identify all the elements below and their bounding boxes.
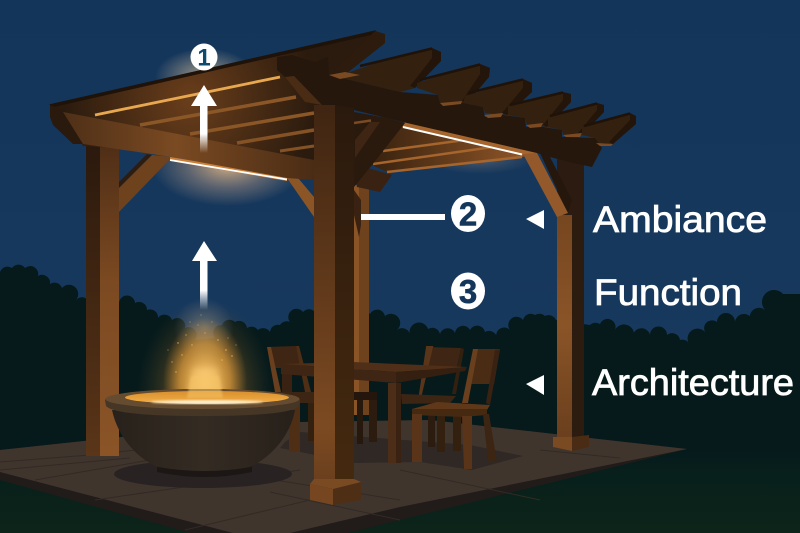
left brace [119, 154, 172, 212]
beam light strip [170, 157, 287, 181]
roof underside and slats [50, 31, 385, 160]
front left beam [50, 105, 314, 180]
glow beneath right beam light [425, 142, 535, 174]
glow beneath beam light [152, 126, 304, 206]
glow above roof [155, 48, 255, 104]
badge 3: 3 [459, 273, 477, 310]
flame over bowl [187, 376, 223, 398]
hedge silhouette [0, 265, 800, 480]
left post [86, 145, 119, 456]
pointer: architecture [526, 375, 544, 395]
patio [0, 420, 687, 533]
plume haze top [174, 298, 234, 358]
fire plume glow [137, 300, 273, 484]
label: Architecture: Architecture [592, 362, 794, 403]
sparks [168, 314, 236, 373]
leader line to badge 2 [361, 214, 445, 220]
fire plume core [163, 318, 247, 446]
table [281, 362, 467, 463]
arrow: upper white arrow [191, 85, 217, 153]
front chair [412, 349, 500, 469]
right-side brace and lower beam [354, 112, 405, 192]
badge 3 [451, 272, 485, 310]
right brace [523, 153, 572, 217]
furniture shadow [280, 432, 523, 470]
label: Function: Function [594, 272, 742, 313]
right roof underside [372, 122, 537, 172]
right rafter tails [329, 48, 636, 144]
fire column [187, 368, 223, 398]
pointer: ambiance [526, 210, 544, 229]
fire bowl [105, 389, 300, 477]
left chair [267, 346, 377, 444]
arrow: lower white arrow [192, 241, 217, 310]
badge 2 [451, 195, 485, 232]
back chair [401, 347, 464, 452]
label: Ambiance: Ambiance [593, 199, 767, 240]
badge 2: 2 [459, 196, 477, 232]
fire bowl shadow [114, 460, 292, 488]
back post [354, 185, 369, 415]
badge 1: 1 [197, 44, 211, 72]
centre post [310, 105, 361, 505]
middle brace [287, 178, 314, 217]
badge 1 [190, 44, 218, 72]
main cross beam [277, 55, 613, 167]
right post [553, 155, 589, 451]
lawn [0, 450, 800, 533]
